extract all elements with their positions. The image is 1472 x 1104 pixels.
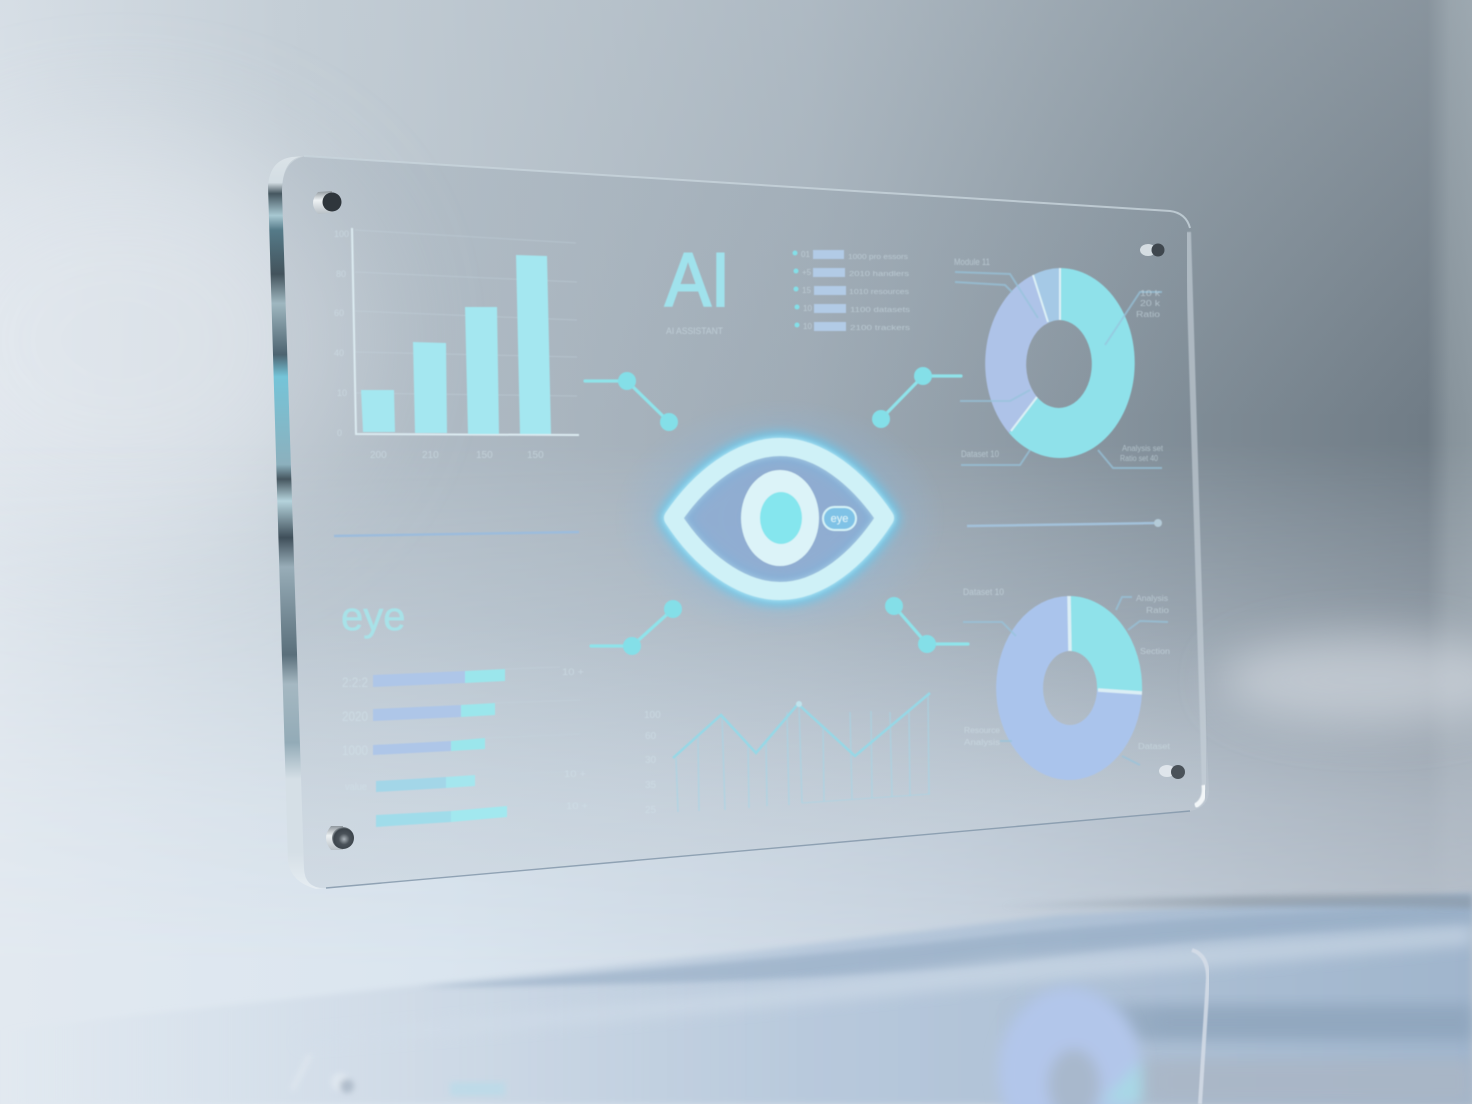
bar 4 — [516, 255, 551, 434]
donut labels: Dataset — [1138, 742, 1171, 751]
legend row 2: 2010 handlers — [849, 271, 910, 278]
connector: bottom left — [591, 600, 682, 655]
label: eye: eye — [341, 595, 406, 639]
legend row 4 — [794, 304, 911, 314]
connector: bottom right — [885, 597, 968, 653]
legend list — [792, 250, 911, 332]
y axis labels: 40 — [334, 348, 344, 358]
x axis labels: 150 — [476, 450, 493, 461]
legend row 2: +5 — [802, 268, 812, 277]
eye outline — [673, 447, 885, 591]
bar 1 — [361, 390, 395, 432]
screw: bottom left — [326, 826, 354, 850]
donut segment: cyan — [1069, 596, 1142, 693]
line chart y labels: 30 — [645, 755, 657, 766]
donut segment: light blue — [1033, 268, 1060, 323]
chart axes — [352, 228, 579, 435]
central eye glow — [615, 400, 945, 636]
donut segment: cyan — [1009, 268, 1135, 458]
icon: eye — [673, 447, 885, 591]
reflected donut — [998, 987, 1142, 1104]
donut segment: lavender — [996, 596, 1142, 780]
panel lower light wash — [296, 620, 1209, 888]
donut labels: 20 k — [1140, 299, 1161, 308]
panel top highlight — [304, 156, 1190, 228]
legend row 3 — [794, 286, 910, 296]
connector: top left — [585, 372, 678, 431]
line chart series — [673, 693, 930, 758]
x axis labels — [370, 450, 544, 461]
donut labels: Analysis set — [1122, 444, 1164, 453]
y axis labels: 100 — [334, 229, 349, 239]
donut labels: Ratio — [1146, 606, 1170, 615]
x axis labels: 210 — [422, 450, 439, 461]
legend row 3: 15 — [802, 286, 811, 295]
donut labels: Resource — [964, 726, 1001, 735]
x axis labels: 200 — [370, 450, 387, 461]
y axis labels: 10 — [337, 388, 347, 398]
row 4 — [345, 769, 586, 793]
line chart y labels — [644, 710, 661, 816]
legend row 5: 10 — [803, 322, 812, 331]
donut labels — [954, 257, 1164, 463]
subtitle under AI: AI ASSISTANT — [666, 326, 723, 336]
bar 2 — [413, 342, 447, 433]
row 1: 2:2:2 — [342, 674, 368, 690]
reflected bottom-left screw and bar — [292, 1055, 505, 1096]
chart grid lines — [355, 230, 577, 396]
y axis labels — [334, 229, 349, 438]
connector: top right — [872, 367, 961, 428]
y axis labels: 0 — [337, 428, 342, 438]
donut chart: top — [954, 257, 1164, 468]
y axis labels: 80 — [336, 269, 346, 279]
legend row 1: 1000 pro essors — [848, 254, 909, 261]
dashboard content — [334, 228, 1171, 827]
legend row 1: 01 — [801, 250, 810, 259]
legend row 1 — [792, 250, 909, 261]
donut labels: Ratio set 40 — [1120, 454, 1158, 463]
donut labels: Analysis — [1136, 594, 1168, 603]
reflected panel edge — [1192, 950, 1208, 1104]
screw: top right — [1140, 244, 1164, 256]
donut dividers — [1069, 596, 1142, 693]
donut labels: Ratio — [1136, 310, 1161, 319]
eye badge — [823, 507, 856, 530]
row 5 — [376, 801, 590, 827]
donut dividers — [1011, 268, 1060, 431]
line chart y labels: 25 — [645, 805, 657, 816]
donut leader lines — [963, 597, 1168, 765]
eye cyan glow — [673, 447, 885, 591]
donut labels — [963, 587, 1171, 751]
divider: right — [967, 519, 1162, 527]
eye iris — [741, 470, 819, 566]
panel left edge — [268, 156, 324, 889]
legend row 3: 1010 resources — [849, 289, 910, 296]
line chart y labels: 35 — [645, 780, 657, 791]
title: AI: AI — [665, 238, 730, 323]
horizontal bar chart — [342, 667, 590, 827]
eye badge: eye — [831, 513, 848, 525]
donut labels: Analysis — [964, 738, 1000, 747]
divider: left — [334, 532, 579, 536]
legend row 2 — [794, 268, 910, 278]
bar 3 — [465, 307, 499, 434]
donut labels: 10 k — [1140, 289, 1161, 298]
row 1 — [342, 667, 584, 690]
row 2 — [342, 700, 580, 724]
donut labels: Dataset 10 — [963, 587, 1004, 597]
legend row 5 — [794, 322, 911, 332]
donut labels: Dataset 10 — [961, 449, 999, 459]
row 3: 1000 — [342, 742, 368, 758]
donut segment: lavender — [985, 275, 1048, 433]
row 4: value — [345, 782, 367, 793]
row 3 — [342, 734, 580, 758]
line chart y labels: 60 — [645, 731, 657, 742]
row 2: 2020 — [342, 708, 368, 724]
panel body — [282, 156, 1209, 888]
bar chart — [334, 228, 579, 461]
eye pupil — [760, 492, 802, 544]
row 1: 10 + — [562, 667, 584, 677]
line chart y labels: 100 — [644, 710, 661, 721]
screw: bottom right — [1159, 765, 1185, 779]
donut labels: Module 11 — [954, 257, 990, 267]
panel bottom edge — [326, 811, 1190, 888]
legend row 4: 1100 datasets — [850, 307, 911, 314]
donut labels: Section — [1140, 647, 1170, 656]
donut leader lines — [955, 272, 1162, 468]
floor reflection of the panel — [0, 893, 1472, 1104]
y axis labels: 60 — [334, 308, 344, 318]
glass panel — [268, 156, 1209, 889]
line chart drop lines — [676, 695, 929, 812]
legend row 4: 10 — [803, 304, 812, 313]
legend row 5: 2100 trackers — [850, 325, 911, 332]
panel bottom-right corner glint — [1195, 785, 1204, 806]
row 5: 10 + — [566, 801, 588, 811]
panel right edge highlight — [1188, 232, 1205, 790]
line chart baseline — [802, 794, 930, 803]
screw: top left — [313, 191, 342, 214]
line chart — [644, 693, 930, 816]
donut chart: bottom — [963, 587, 1171, 780]
x axis labels: 150 — [527, 450, 544, 461]
row 4: 10 + — [564, 769, 586, 779]
